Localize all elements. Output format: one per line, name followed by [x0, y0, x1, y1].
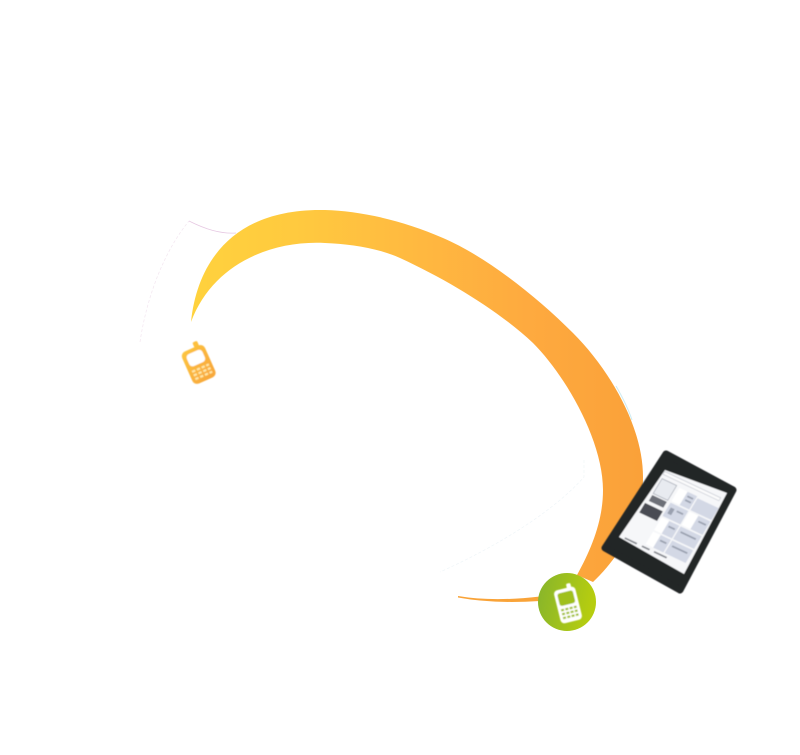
- tablet body: [605, 454, 733, 590]
- icon: e-reader tablet: [605, 454, 733, 590]
- left column cards: [639, 478, 678, 521]
- faint outline arc: [140, 221, 632, 572]
- search bar: [663, 471, 721, 501]
- orange arc band: [191, 210, 643, 582]
- tile detail marks: [653, 492, 716, 555]
- book tiles: [646, 488, 719, 563]
- icon: orange phone: [178, 339, 217, 386]
- tablet screen: [619, 470, 727, 574]
- screen contents: [624, 471, 724, 567]
- bottom tabs: [624, 537, 667, 559]
- orange arc tail: [458, 596, 540, 602]
- icon: green phone badge: [538, 573, 596, 631]
